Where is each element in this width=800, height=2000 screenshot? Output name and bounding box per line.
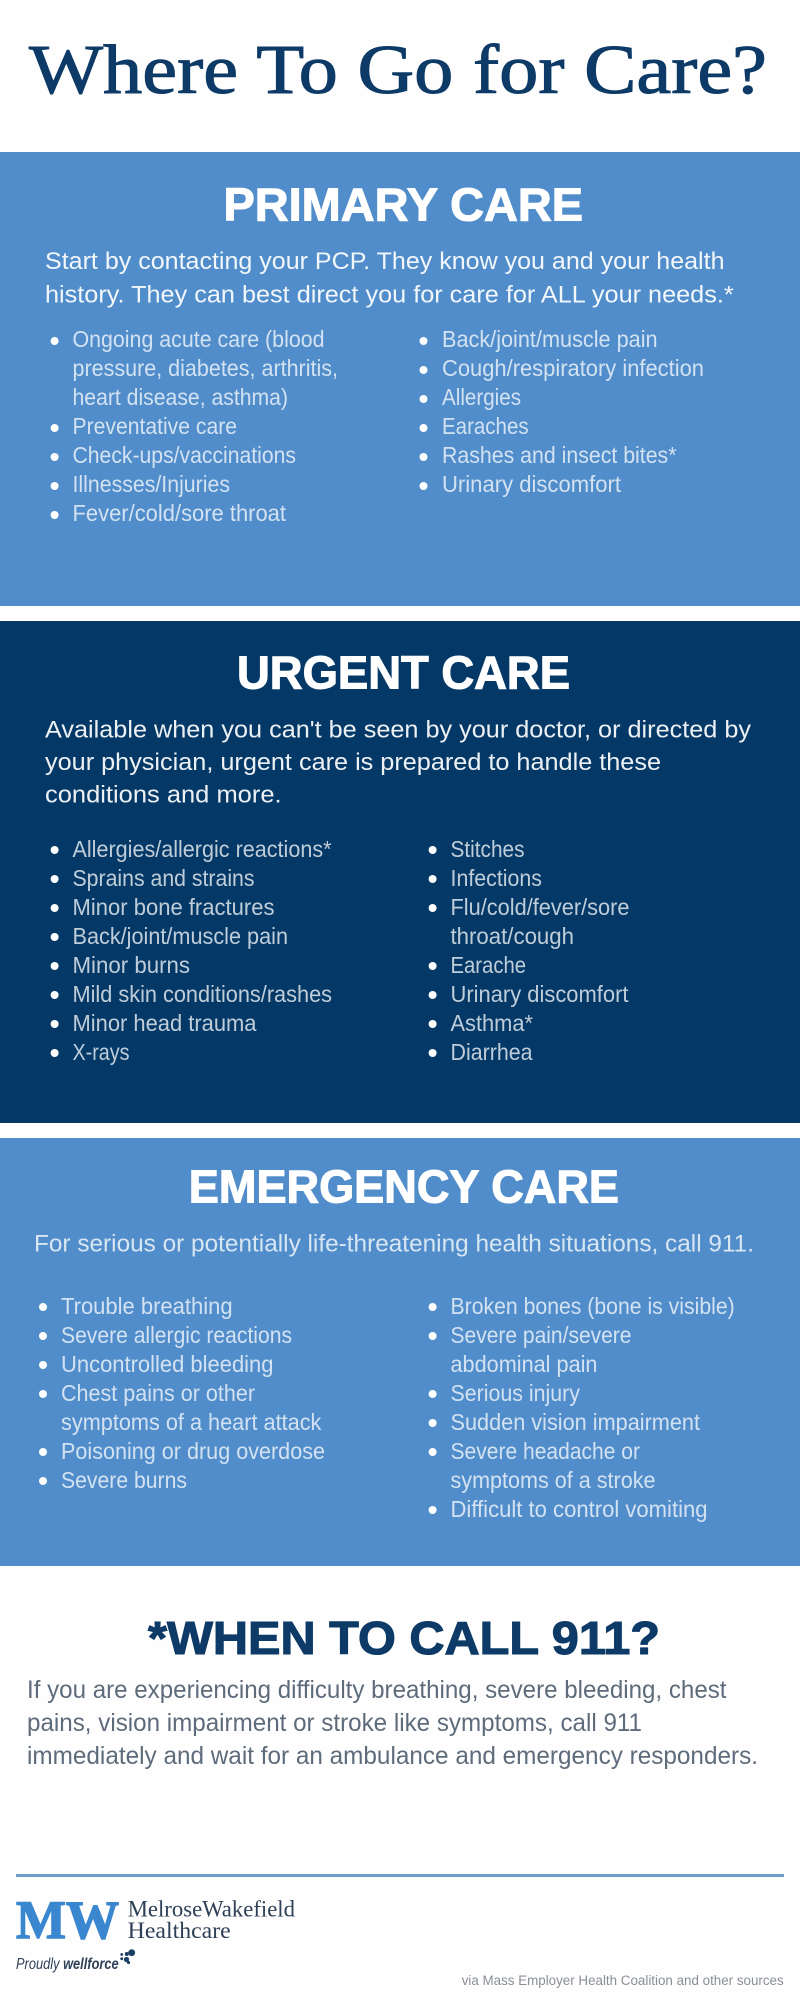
source note: via Mass Employer Health Coalition and other sources	[462, 1973, 784, 1988]
intro text: urgent care	[45, 716, 752, 809]
list: urgent care left column	[51, 836, 332, 1065]
intro text: urgent care: your physician, urgent care is prepared to handle these	[45, 749, 661, 776]
list: primary care left column: Preventative care	[72, 413, 237, 439]
list: primary care right column: Urinary discomfort	[442, 471, 622, 497]
list: urgent care right column: Infections	[450, 865, 542, 891]
list: emergency care left column: Trouble breathing	[61, 1293, 233, 1319]
list: primary care left column: Ongoing acute care (blood	[72, 326, 324, 352]
list: primary care right column: Cough/respiratory infection	[442, 355, 704, 381]
list: urgent care left column: Back/joint/muscle pain	[72, 923, 288, 949]
list: emergency care left column: Severe allergic reactions	[61, 1322, 292, 1348]
list: emergency care left column: Poisoning or drug overdose	[61, 1438, 325, 1464]
logo wordmark: Healthcare	[128, 1918, 231, 1943]
list: primary care right column: Earaches	[442, 413, 529, 439]
panel: primary care	[0, 152, 800, 606]
list: emergency care left column: Uncontrolled bleeding	[61, 1351, 274, 1377]
intro text: primary care: Start by contacting your PCP. They know you and your health	[45, 248, 724, 275]
list: emergency care left column	[39, 1293, 325, 1493]
heading: emergency care: EMERGENCY CARE	[189, 1161, 619, 1213]
list: urgent care left column: Allergies/allergic reactions*	[72, 836, 332, 862]
text block: when to call 911: pains, vision impairment or stroke like symptoms, call 911	[27, 1709, 642, 1737]
intro text: primary care: history. They can best direct you for care for ALL your needs.*	[45, 282, 734, 308]
list: urgent care right column: Stitches	[450, 836, 524, 862]
panel: urgent care	[0, 621, 800, 1123]
list: urgent care right column	[429, 836, 630, 1065]
list: urgent care right column: Earache	[450, 952, 526, 978]
list: primary care left column	[51, 326, 338, 526]
list: emergency care right column	[429, 1293, 735, 1522]
icon: wellforce dots	[120, 1949, 135, 1964]
list: urgent care right column: Asthma*	[450, 1010, 533, 1036]
list: urgent care right column: Urinary discomfort	[450, 981, 629, 1007]
logo mark: MW: MW	[16, 1890, 119, 1950]
text block: when to call 911: If you are experiencing difficulty breathing, severe bleeding, chest	[27, 1676, 727, 1704]
list: urgent care left column: Sprains and strains	[72, 865, 254, 891]
heading: urgent care: URGENT CARE	[237, 646, 570, 698]
list: primary care right column: Rashes and insect bites*	[442, 442, 677, 468]
list: primary care left column: Illnesses/Injuries	[72, 471, 230, 497]
list: urgent care left column: Minor head trauma	[72, 1010, 257, 1036]
list: urgent care right column: Diarrhea	[450, 1039, 533, 1065]
list: emergency care left column: symptoms of a heart attack	[61, 1409, 322, 1435]
list: primary care left column: Check-ups/vaccinations	[72, 442, 296, 468]
list: emergency care right column: Severe pain/severe	[450, 1322, 632, 1348]
list: urgent care left column: Minor bone fractures	[72, 894, 274, 920]
list: emergency care right column: abdominal pain	[450, 1351, 598, 1377]
logo wordmark	[128, 1897, 295, 1943]
list: emergency care right column: Sudden vision impairment	[450, 1409, 701, 1435]
title: Where To Go for Care?	[29, 32, 767, 109]
intro text: primary care	[45, 248, 734, 308]
list: primary care left column: heart disease, asthma)	[72, 384, 288, 410]
list: emergency care right column: Serious injury	[450, 1380, 580, 1406]
list: urgent care left column: Minor burns	[72, 952, 190, 978]
logo wordmark: MelroseWakefield	[128, 1897, 295, 1922]
list: urgent care left column: X-rays	[72, 1039, 130, 1065]
list: emergency care right column: Broken bones (bone is visible)	[450, 1293, 735, 1319]
list: emergency care right column: symptoms of a stroke	[450, 1467, 656, 1493]
list: primary care left column: pressure, diabetes, arthritis,	[72, 355, 338, 381]
list: urgent care right column: Flu/cold/fever/sore	[450, 894, 630, 920]
panel: emergency care	[0, 1138, 800, 1566]
logo: Proudly wellforce: Proudly wellforce	[16, 1956, 119, 1973]
text block: when to call 911	[27, 1676, 758, 1770]
intro text: urgent care: Available when you can't be seen by your doctor, or directed by	[45, 716, 752, 743]
list: primary care right column	[420, 326, 704, 497]
list: emergency care left column: Severe burns	[61, 1467, 187, 1493]
list: primary care left column: Fever/cold/sore throat	[72, 500, 287, 526]
list: emergency care right column: Difficult to control vomiting	[450, 1496, 708, 1522]
list: primary care right column: Back/joint/muscle pain	[442, 326, 658, 352]
intro text: emergency care: For serious or potentially life-threatening health situations, call 911.	[34, 1231, 754, 1258]
list: primary care right column: Allergies	[442, 384, 521, 410]
list: emergency care left column: Chest pains or other	[61, 1380, 255, 1406]
heading: when to call 911: *WHEN TO CALL 911?	[148, 1612, 660, 1664]
list: urgent care left column: Mild skin conditions/rashes	[72, 981, 332, 1007]
heading: primary care: PRIMARY CARE	[224, 178, 583, 230]
logo: MelroseWakefield Healthcare	[16, 1890, 295, 1950]
text block: when to call 911: immediately and wait for an ambulance and emergency responders.	[27, 1742, 758, 1770]
list: emergency care right column: Severe headache or	[450, 1438, 640, 1464]
list: urgent care right column: throat/cough	[450, 923, 574, 949]
intro text: urgent care: conditions and more.	[45, 782, 282, 809]
